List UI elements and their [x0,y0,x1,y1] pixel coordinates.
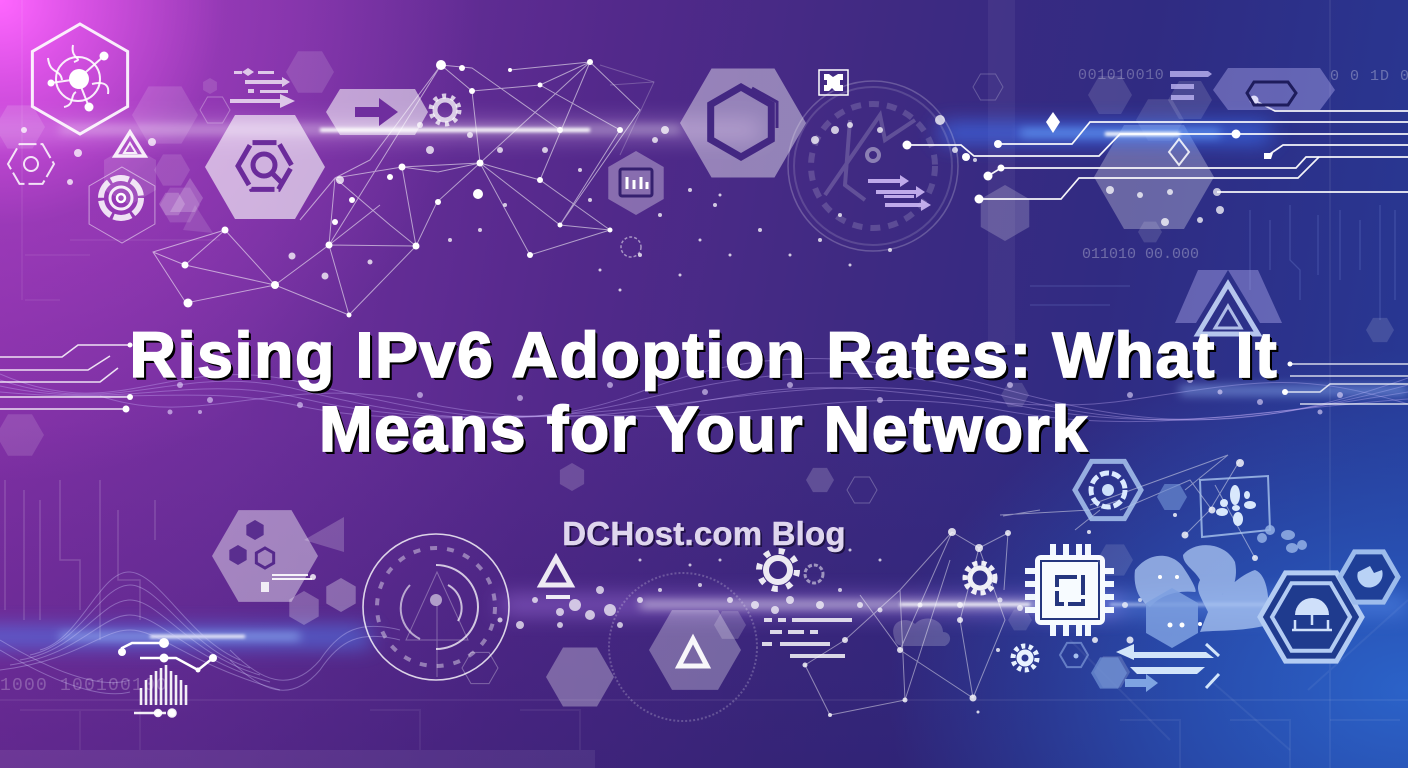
icon: hexagon cluster lower left [212,510,344,602]
streak: upper left purple light beam [0,122,760,138]
icon: gear right of centre [965,563,995,593]
icon: hexagon with chart [608,151,664,215]
icon: large hexagon with lens [205,115,325,219]
icon: elongated hexagon top right [1213,68,1335,110]
icon: hexagon with network hub [32,24,128,134]
icon: exchange arrows [1091,644,1219,692]
binary text: mid right: 011010 00.000 [1082,246,1199,263]
faint hexagons near chip [1008,544,1133,630]
faint vertical band [988,0,1015,345]
streak: lower left blue light beam [0,629,370,645]
small dark polygon near flower [1157,484,1187,510]
circuit traces: left middle [0,342,133,412]
icon: microchip [1025,544,1114,636]
bottom left lighter strip [0,750,595,768]
icon: small gear [1013,646,1037,670]
icon: audio bars [134,665,186,716]
streak: lower centre light beam [500,597,1408,613]
icon: arrows lines [230,68,295,108]
small dashed ring [621,237,641,257]
icon: hexagon with arrow [326,89,428,135]
network lines: upper right [600,65,1003,155]
icon: list lines top right [1170,71,1212,100]
faint circuit lines lower left [5,480,155,640]
icon: triangle in hexagon right [1175,270,1282,334]
title: Rising IPv6 Adoption Rates: What It [130,319,1278,391]
icon: cloud blobs [1135,545,1269,648]
icon: triangle [115,132,145,156]
waves lower left [0,572,400,694]
small cloud lower centre [893,618,950,646]
icon: dashed lines [762,618,852,658]
binary text: top right: 001010010 [1078,67,1164,84]
icon: gear [431,96,459,124]
binary text: lower left: 1000 100100100 [0,676,168,696]
network graph: upper left [21,59,1224,318]
title: Means for Your Network [319,393,1089,465]
circuit traces: upper right [902,96,1408,204]
wave band behind title [0,358,1408,422]
icon: small outlined hexagon with ring [8,144,54,184]
subtitle: DCHost.com Blog: DCHost.com Blog [562,515,846,552]
icon: hexagon with dome [1260,573,1362,661]
streak: upper right blue light beam [940,125,1270,141]
icon: radial dial lower centre left [363,534,509,680]
icon: central top hexagon [680,68,806,178]
network graph: lower right [498,455,1258,717]
icon: arrows inside dial [868,175,931,211]
icon: concentric circle target in hexagon [89,167,155,243]
icon: node path lower left [118,638,217,672]
small outline hexagon with dot [1060,643,1088,667]
streak: mid right beam [1180,386,1408,395]
icon: triangle lower centre [541,558,571,597]
icon: hexagon with wrench [1340,552,1398,602]
dotted ring lower centre [609,573,757,721]
faint hexagons: upper band [0,51,1394,456]
faint hexagons: mid and lower band [289,463,1130,706]
faint vertical circuit lines upper right [1030,205,1395,320]
circuit traces: right middle [1282,362,1408,404]
title [130,319,1279,465]
pebble cluster [1257,525,1307,553]
icon: small white square [819,70,848,95]
dial ring with arrows [788,81,958,251]
scatter dots: wave band [168,377,1343,414]
icon: hexagon with flower [1075,461,1141,519]
small hexes and triangle near big hexagon [159,97,230,233]
icon: gear lower centre [759,551,823,589]
icon: square with pebbles [1200,476,1270,537]
icon: hexagon with triangle lower centre [649,610,741,690]
